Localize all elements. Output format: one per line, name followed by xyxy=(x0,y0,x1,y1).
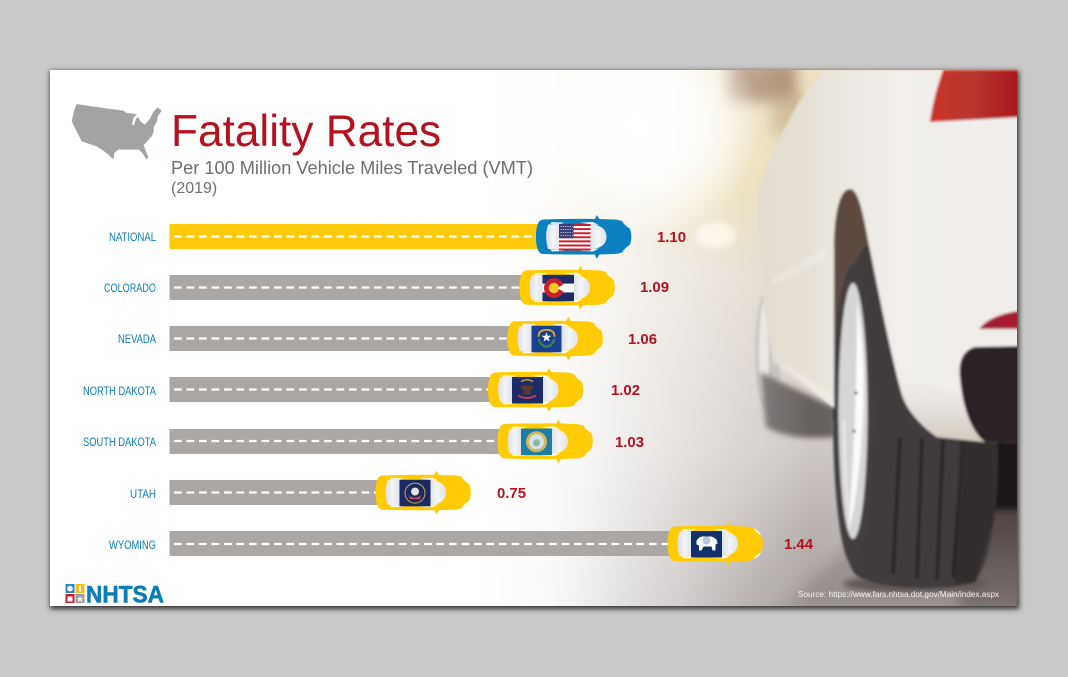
car: National with US flag xyxy=(536,215,631,259)
row: National xyxy=(109,215,686,259)
year: (2019) xyxy=(171,180,217,197)
logo: NHTSA xyxy=(66,582,164,608)
value: National: 1.10 xyxy=(657,230,686,246)
road: North Dakota xyxy=(170,377,494,402)
car: Wyoming flag xyxy=(668,522,763,566)
car: Utah flag xyxy=(376,471,471,514)
value: Colorado: 1.09 xyxy=(640,280,669,296)
title: Fatality Rates xyxy=(171,107,441,156)
road: Wyoming xyxy=(170,531,672,556)
value: North Dakota: 1.02 xyxy=(611,383,640,399)
label: South Dakota: SOUTH DAKOTA xyxy=(83,435,156,449)
road: Utah xyxy=(170,480,380,505)
car: South Dakota flag xyxy=(498,420,593,463)
value: Wyoming: 1.44 xyxy=(784,537,813,553)
label: Colorado: COLORADO xyxy=(104,281,156,295)
road: South Dakota xyxy=(170,429,502,454)
source note: Source: https://www.fars.nhtsa.dot.gov/Main/index.aspx xyxy=(798,589,1000,599)
row: Wyoming xyxy=(109,522,813,566)
row: South Dakota xyxy=(83,420,644,463)
car: North Dakota flag xyxy=(488,368,583,412)
row: Colorado xyxy=(104,266,669,310)
road: National xyxy=(170,224,542,249)
row: North Dakota xyxy=(83,368,640,412)
road: Nevada xyxy=(170,326,512,351)
row: Nevada xyxy=(118,317,657,360)
value: South Dakota: 1.03 xyxy=(615,435,644,451)
value: Nevada: 1.06 xyxy=(628,332,657,348)
panel: infographic xyxy=(50,70,1017,606)
label: Wyoming: WYOMING xyxy=(109,538,156,552)
label: North Dakota: NORTH DAKOTA xyxy=(83,384,156,398)
icon: NHTSA squares xyxy=(66,584,84,603)
icon: US map xyxy=(72,104,162,160)
car: Nevada flag xyxy=(508,317,603,360)
value: Utah: 0.75 xyxy=(497,486,526,502)
label: National: NATIONAL xyxy=(109,230,156,244)
row: Utah xyxy=(130,471,526,514)
subtitle: Per 100 Million Vehicle Miles Traveled (VMT) xyxy=(171,157,533,178)
label: Utah: UTAH xyxy=(130,487,156,501)
car: Colorado flag xyxy=(520,266,615,310)
label: Nevada: NEVADA xyxy=(118,332,156,346)
photo: white car on road xyxy=(480,10,1030,616)
road: Colorado xyxy=(170,275,524,300)
